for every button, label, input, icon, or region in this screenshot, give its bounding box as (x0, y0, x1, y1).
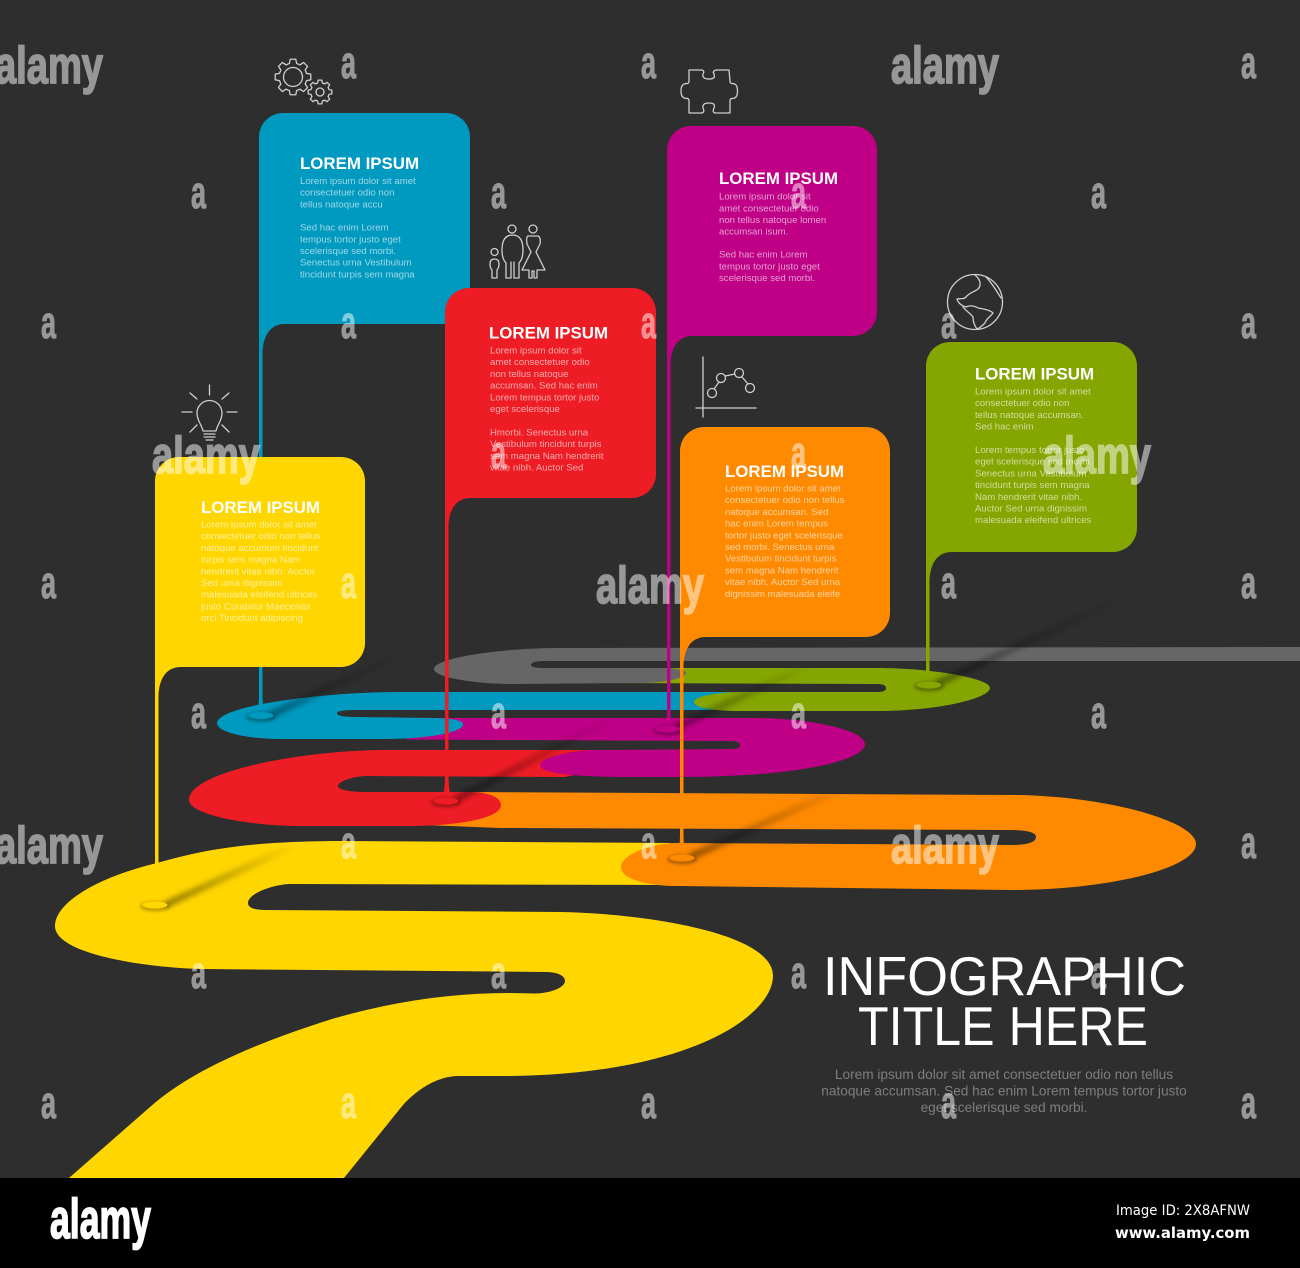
text block: orange panel: Lorem ipsum dolor sit amet (725, 484, 841, 494)
text block: green panel: Lorem ipsum dolor sit amet (975, 386, 1091, 398)
watermark: a (341, 817, 357, 868)
text block: yellow panel: hendrerit vitae nibh. Auctor (201, 566, 316, 577)
watermark: a (341, 557, 357, 608)
watermark: a (1091, 167, 1107, 218)
text block: red panel: Lorem tempus tortor justo (490, 392, 599, 403)
text block: magenta panel: tempus tortor justo eget (719, 261, 820, 272)
text block: blue panel: consectetuer odio non (300, 188, 394, 199)
panel: magenta (653, 126, 877, 736)
text block: orange panel: natoque accumsan. Sed (725, 507, 828, 518)
watermark: a (1091, 947, 1107, 998)
text block: green panel (975, 386, 1092, 526)
pin: red (431, 798, 461, 808)
panel: yellow (140, 457, 365, 912)
pin: green (914, 682, 944, 692)
text block: green panel: eget scelerisque sed morbi. (975, 457, 1092, 468)
text block: red panel: sem magna Nam hendrerit (490, 451, 604, 462)
road segment: grey (434, 647, 1300, 684)
pin: blue (246, 320, 276, 722)
watermark: a (41, 557, 57, 608)
text block: blue panel (300, 176, 416, 280)
text block: yellow panel: orci Tincidunt adipiscing (201, 613, 303, 624)
text block: magenta panel: non tellus natoque lomen (719, 215, 826, 226)
watermark: a (641, 297, 657, 348)
watermark: a (641, 817, 657, 868)
icon: line chart (696, 357, 756, 417)
subtitle: eget scelerisque sed morbi. (921, 1100, 1087, 1115)
text block: yellow panel: consectetuer odio non tellus (201, 531, 321, 542)
footer bar (0, 1178, 1300, 1268)
text block: blue panel: tellus natoque accu (300, 199, 383, 210)
pin: orange (667, 854, 697, 864)
text block: red panel: non tellus natoque (490, 369, 568, 380)
watermark: a (1241, 1077, 1257, 1128)
heading: orange panel: LOREM IPSUM (725, 462, 844, 481)
watermark: a (41, 297, 57, 348)
icon: puzzle piece (681, 70, 738, 113)
text block: yellow panel: Lorem ipsum dolor sit amet (201, 520, 317, 530)
title (823, 945, 1186, 1057)
text block: red panel: Vestibulum tincidunt turpis (490, 439, 602, 450)
watermark: a (941, 1077, 957, 1128)
winding road (55, 647, 1300, 1178)
heading: magenta panel: LOREM IPSUM (719, 169, 838, 188)
watermark: a (791, 427, 807, 478)
icon: globe (948, 274, 1002, 330)
text block: green panel: Senectus urna Vestibulum (975, 468, 1086, 479)
text block: red panel: vitae nibh. Auctor Sed (490, 462, 583, 474)
text block: orange panel: sed morbi. Senectus urna (725, 542, 835, 553)
text block: green panel: malesuada eleifend ultrices (975, 515, 1091, 526)
text block: yellow panel: justo Curabitur Maecenas (200, 601, 311, 612)
watermark: a (491, 947, 507, 998)
text block: magenta panel: scelerisque sed morbi. (719, 273, 815, 284)
text block: blue panel: Lorem ipsum dolor sit amet (300, 176, 416, 187)
text block: blue panel: tempus tortor justo eget (300, 234, 401, 245)
text block: red panel: eget scelerisque (490, 404, 560, 415)
watermark: a (941, 557, 957, 608)
heading: yellow panel: LOREM IPSUM (201, 498, 320, 517)
watermark: alamy (891, 37, 999, 95)
text block: yellow panel (200, 520, 321, 624)
speech shape: yellow (155, 457, 365, 866)
footer url: www.alamy.com (1115, 1224, 1250, 1242)
watermark: a (191, 167, 207, 218)
watermark: a (41, 1077, 57, 1128)
text block: yellow panel: natoque accumum tincidunt (201, 543, 319, 554)
text block: red panel: Lorem ipsum dolor sit (490, 346, 582, 356)
watermark: a (791, 947, 807, 998)
panel: blue (259, 113, 470, 480)
text block: green panel: tellus natoque accumsan. (975, 410, 1084, 421)
heading: red panel: LOREM IPSUM (489, 324, 608, 342)
text block: orange panel: consectetuer odio non tellus (725, 495, 845, 506)
text block: green panel: consectetuer odio non (975, 398, 1069, 409)
icon: family (490, 225, 545, 278)
text block: blue panel: Senectus urna Vestibulum (300, 258, 411, 269)
subtitle: natoque accumsan. Sed hac enim Lorem tempus tortor justo (821, 1084, 1187, 1098)
footer image id: Image ID: 2X8AFNW (1116, 1203, 1250, 1219)
watermark: a (491, 167, 507, 218)
speech shape: magenta (664, 126, 877, 727)
heading: green panel: LOREM IPSUM (975, 364, 1094, 384)
text block: green panel: Sed hac enim (975, 422, 1034, 433)
watermark: a (941, 297, 957, 348)
panel: red (431, 288, 656, 808)
watermark: a (341, 37, 357, 88)
text block: yellow panel: malesuada eleifend ultrices (201, 590, 317, 601)
text block: green panel: tincidunt turpis sem magna (975, 480, 1090, 491)
watermark: alamy (1043, 427, 1151, 485)
speech shape: green (924, 342, 1137, 683)
heading: blue panel: LOREM IPSUM (300, 154, 419, 173)
watermark: a (791, 167, 807, 218)
text block: red panel: Hmorbi. Senectus urna (490, 427, 589, 438)
text block: green panel: Lorem tempus tortor justo (975, 445, 1084, 456)
watermark: alamy (596, 557, 704, 615)
watermark: a (1241, 557, 1257, 608)
text block: magenta panel: Lorem ipsum dolor sit (719, 192, 811, 203)
panel: orange (667, 427, 890, 864)
text block: green panel: Nam hendrerit vitae nibh. (975, 492, 1082, 503)
text block: orange panel (725, 484, 845, 600)
road segment: orange (425, 792, 1196, 890)
text block: magenta panel: amet consectetuer odio (719, 203, 819, 214)
icon: gears (275, 59, 332, 104)
text block: orange panel: sem magna Nam hendrerit (725, 565, 839, 576)
watermark: a (491, 687, 507, 738)
watermark: a (491, 427, 507, 478)
text block: red panel (490, 346, 604, 474)
speech shape: red (442, 288, 656, 798)
watermark: a (341, 297, 357, 348)
watermark: a (641, 1077, 657, 1128)
watermark: a (191, 687, 207, 738)
road segment: green (600, 668, 990, 711)
text block: blue panel: scelerisque sed morbi. (300, 246, 396, 257)
pin shadows (165, 595, 1130, 905)
title: TITLE HERE (858, 995, 1148, 1057)
title: INFOGRAPHIC (823, 945, 1186, 1007)
footer logo: alamy (50, 1187, 151, 1250)
text block: magenta panel: accumsan isum. (719, 227, 788, 238)
text block: yellow panel: Sed urna dignissim (201, 578, 283, 589)
speech shape: blue (259, 113, 470, 480)
text block: green panel: Auctor Sed urna dignissim (975, 504, 1087, 514)
watermark: a (1241, 817, 1257, 868)
text block: orange panel: vitae nibh. Auctor Sed urna (725, 577, 841, 588)
road segment: red (189, 750, 600, 826)
icon: light bulb (182, 385, 237, 440)
panel: green (914, 342, 1137, 692)
road segment: magenta (405, 718, 865, 777)
text block: orange panel: tortor justo eget scelerisque (725, 530, 843, 541)
speech shape: orange (677, 427, 890, 855)
watermark: a (341, 1077, 357, 1128)
subtitle (821, 1067, 1187, 1115)
text block: red panel: accumsan. Sed hac enim (490, 381, 598, 392)
text block: yellow panel: turpis sem magna Nam (201, 555, 300, 566)
text block: blue panel: Sed hac enim Lorem (300, 223, 389, 234)
watermark: a (791, 687, 807, 738)
watermark: a (1091, 687, 1107, 738)
pin: yellow (140, 902, 170, 912)
road segment: blue (217, 692, 730, 739)
text block: blue panel: tincidunt turpis sem magna (300, 269, 415, 280)
text block: orange panel: hac enim Lorem tempus (725, 519, 828, 530)
text block: red panel: amet consectetuer odio (490, 357, 590, 368)
text block: orange panel: Vestibulum tincidunt turpis (725, 554, 837, 565)
pin: magenta (653, 726, 683, 736)
text block: magenta panel: Sed hac enim Lorem (719, 250, 808, 261)
watermark: a (191, 947, 207, 998)
subtitle: Lorem ipsum dolor sit amet consectetuer odio non tellus (835, 1067, 1173, 1082)
text block: magenta panel (719, 192, 826, 284)
watermark: alamy (152, 427, 260, 485)
watermark: a (1241, 297, 1257, 348)
watermark: a (1241, 37, 1257, 88)
road segment: yellow (55, 841, 773, 1178)
watermark: a (641, 37, 657, 88)
text block: orange panel: dignissim malesuada eleife (725, 589, 840, 600)
watermark: alamy (891, 817, 999, 875)
